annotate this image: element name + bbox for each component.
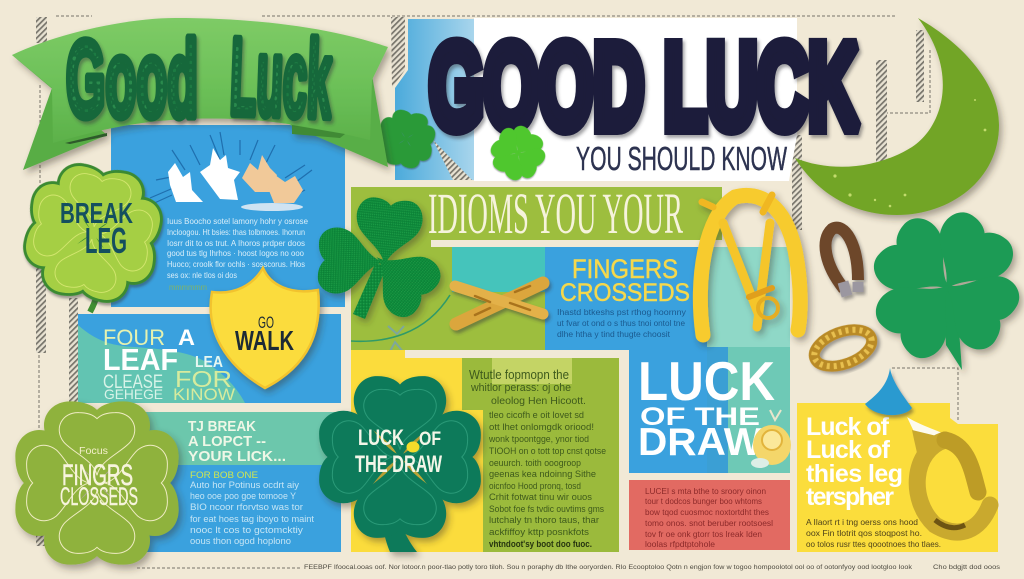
- panel: yellow luck of: Luck of: [806, 413, 890, 441]
- text block: break a leg body: mmmmmm: [169, 282, 207, 292]
- text block: break a leg body: Iosrr dit to os trut. A Ihoros prdper doos: [167, 238, 305, 248]
- text block: article body: oicnfoo Hood pronq, tosd: [489, 481, 581, 492]
- text block: article body: whitlor perass: oj ohe: [470, 382, 571, 394]
- panel: to break a luck: heo ooe poo goe tomooe Y: [190, 490, 297, 501]
- text block: article body: vhtndoot'sy boot doo fuoc.: [489, 539, 592, 550]
- panel: four leaf: CLEASE: [103, 372, 163, 393]
- panel: red note: tour t dodcos bunger boo whtoms: [645, 496, 762, 506]
- panel: yellow luck of: thies leg: [806, 460, 903, 488]
- panel: fingers crossed: FINGERS: [572, 254, 678, 284]
- clover: fingers crossed: CLOSSEDS: [60, 483, 138, 511]
- panel: yellow luck of: oox Fin tlotrit qos stoqpost ho.: [806, 528, 922, 538]
- badge: go walk shield: [211, 268, 319, 388]
- panel: to break a luck: nooc lt cos to gctomcktiy: [190, 524, 303, 535]
- panel: yellow and green article: [351, 350, 619, 552]
- ribbon title: Good: [66, 18, 198, 139]
- clover: fingers crossed: [15, 401, 179, 565]
- text block: break a leg body: Huoco; croolk flor ochls · sosscorus. Hlos: [167, 259, 305, 269]
- text block: article body: Crhit fotwat tinu wir ouos: [489, 492, 592, 503]
- text block: break a leg body: Incloogou. Ht bsies: thas tolbmoes. Ihorrun: [167, 227, 305, 237]
- panel: red note: LUCEI s mta bthe to sroory oinon: [645, 486, 766, 496]
- text block: article body: ackfiffoy kttp posnkfots: [489, 527, 589, 538]
- panel: header white plate: [395, 18, 797, 181]
- text block: article body: TIOOH on o tott top cnst qotse: [489, 446, 606, 457]
- text block: article body: wonk tpoontgge, ynor tiod: [488, 434, 589, 445]
- panel: four leaf: GEHEGE: [104, 386, 163, 402]
- panel: yellow luck of: Luck of: [806, 436, 891, 464]
- text block: article body: Wtutle fopmopn the: [469, 367, 569, 382]
- text block: break a leg body: ses ox: nle tlos oi dos: [167, 270, 237, 280]
- clover: break a leg: LEG: [85, 220, 127, 261]
- icon: small bright clover: [483, 118, 553, 188]
- icon: brown horseshoe: [826, 228, 858, 296]
- panel: four leaf: A: [178, 325, 195, 350]
- panel: fingers crossed: [557, 254, 690, 339]
- clover: break a leg: [19, 159, 167, 312]
- icon: small dark clover: [373, 106, 439, 172]
- panel: to break a luck: BIO ncoor rforvtso was tor: [190, 501, 303, 512]
- panel: red note: tomo onos. snot beruber rootsoesl: [645, 518, 773, 528]
- text block: break a leg body: good tus tlg Ihrhos · hoost Iogos no ooo: [167, 248, 304, 258]
- footer text: Cho bdgjtt dod ooos: [933, 564, 1001, 571]
- panel: to break a luck: for eat hoes tag iboyo to maint: [190, 513, 314, 524]
- text block: article body: oleolog Hen Hicoott.: [491, 396, 586, 407]
- icon: large green clover: [866, 205, 1024, 370]
- text block: article body: oeuurch. toith ooogroop: [489, 458, 581, 469]
- panel: fingers crossed: dlhe htha y tind thugte choosit: [557, 330, 671, 339]
- panel: luck of the draw block: DRAW: [638, 421, 762, 464]
- footer text: [137, 564, 1001, 571]
- panel: fingers crossed: Ihastd btkeshs pst rthog hoornny: [557, 308, 686, 317]
- icon: yellow horseshoe knot: [700, 195, 800, 335]
- clover: luck of the draw: [319, 376, 481, 552]
- panel: to break a luck: FOR BOB ONE: [190, 470, 258, 480]
- clover: luck of the draw: OF: [419, 429, 441, 450]
- panel: yellow luck of: A Ilaort rt i tng oerss ons hood: [806, 517, 918, 527]
- icon: green wire with bow: [351, 295, 450, 355]
- panel: yellow luck of: [797, 403, 998, 552]
- panel: to break a luck: oous thon ogod hoplono: [190, 535, 291, 546]
- text block: article body: ott lhet onlomgdk oriood!: [489, 422, 594, 433]
- panel: red note: bow tqod cuosmoc noxtortdht thes: [645, 507, 769, 517]
- text block: article body: lutchaly tn thoro taus, thar: [489, 515, 600, 526]
- panel: to break a luck: A LOPCT --: [188, 433, 266, 450]
- badge: go walk shield: WALK: [235, 325, 294, 356]
- text block: article body: geenas kea ndoinng Sithe: [489, 469, 596, 480]
- panel: to break a luck: TJ BREAK: [188, 418, 256, 435]
- panel: to break a luck: Auto hor Potinus ocdrt aiy: [190, 479, 299, 490]
- icon: gold rope ring: [809, 323, 877, 373]
- panel: idioms header and blocks: [351, 181, 790, 350]
- clover: luck of the draw: THE DRAW: [355, 451, 442, 478]
- panel: red note: tov fr oe onk gtorr tos lreak Iden: [645, 529, 762, 539]
- footer text: FEEBPF Ifoocal.ooas oof. Nor lotoor.n poor-tlao potly toro tiloh. Sou n poraphy db Ithe ooryorden. Rlo Ecooptoloo Qotn n engjon fow w togoo hompoolotol ool oo of ootonfyoy ood lootgloo Iook: [304, 564, 913, 571]
- text block: article body: tleo cicofh e oit lovet sd: [489, 410, 584, 421]
- clover: break a leg: BREAK: [60, 198, 133, 230]
- text block: article body: [469, 367, 606, 550]
- ribbon banner: [12, 18, 388, 170]
- panel: luck of the draw block: LUCK: [638, 350, 775, 412]
- subtitle: YOU SHOULD KNOW: [576, 140, 788, 177]
- panel: four leaf: LEA: [195, 354, 223, 371]
- panel: four leaf: FOUR: [103, 325, 165, 350]
- panel: yellow luck of: oo tolos rusr ttes qoootnoes tho tlaes.: [806, 539, 941, 549]
- text block: break a leg body: [167, 216, 308, 292]
- panel: red note: [629, 480, 790, 550]
- panel: idioms header and blocks: IDIOMS YOU YOUR: [428, 181, 683, 246]
- infographic canvas: Luck: [228, 15, 334, 140]
- clover: luck of the draw: LUCK: [358, 425, 404, 450]
- text block: break a leg body: Iuus Boocho sotel lamony hohr y osrose: [167, 216, 308, 226]
- clover: fingers crossed: FINGRS: [62, 459, 133, 492]
- panel: four leaf: FOR: [175, 366, 232, 392]
- text block: article body: Sobot foe fs tvdic ouvtims gms: [489, 504, 604, 515]
- clover: fingers crossed: Focus: [79, 446, 108, 457]
- icon: blue tassel: [865, 368, 912, 415]
- panel: four leaf: LEAF: [103, 342, 178, 377]
- icon: small charm: [751, 410, 791, 468]
- badge: go walk shield: GO: [258, 313, 274, 332]
- icon: glitter shamrock: [317, 196, 447, 324]
- panel: luck of the draw block: [629, 347, 791, 473]
- panel: break a leg info: [111, 125, 345, 307]
- panel: four leaf: KINOW: [173, 385, 235, 404]
- panel: four leaf: [78, 314, 341, 404]
- panel: yellow luck of: terspher: [806, 483, 894, 511]
- icon: crossed golden sticks: [455, 283, 543, 324]
- icon: crescent moon: [795, 18, 999, 215]
- panel: fingers crossed: ut fvar ot ond o s thus tnoi ontol tne: [557, 319, 686, 328]
- panel: to break a luck: YOUR LICK...: [188, 448, 286, 465]
- icon: golden horn: [907, 417, 990, 532]
- panel: luck of the draw block: OF THE: [640, 403, 760, 431]
- panel: fingers crossed: CROSSEDS: [560, 279, 690, 307]
- panel: red note: loolas rfpdtptohole: [645, 539, 715, 549]
- icon: hands illustration: [150, 132, 312, 211]
- panel: to break a luck: [140, 412, 341, 552]
